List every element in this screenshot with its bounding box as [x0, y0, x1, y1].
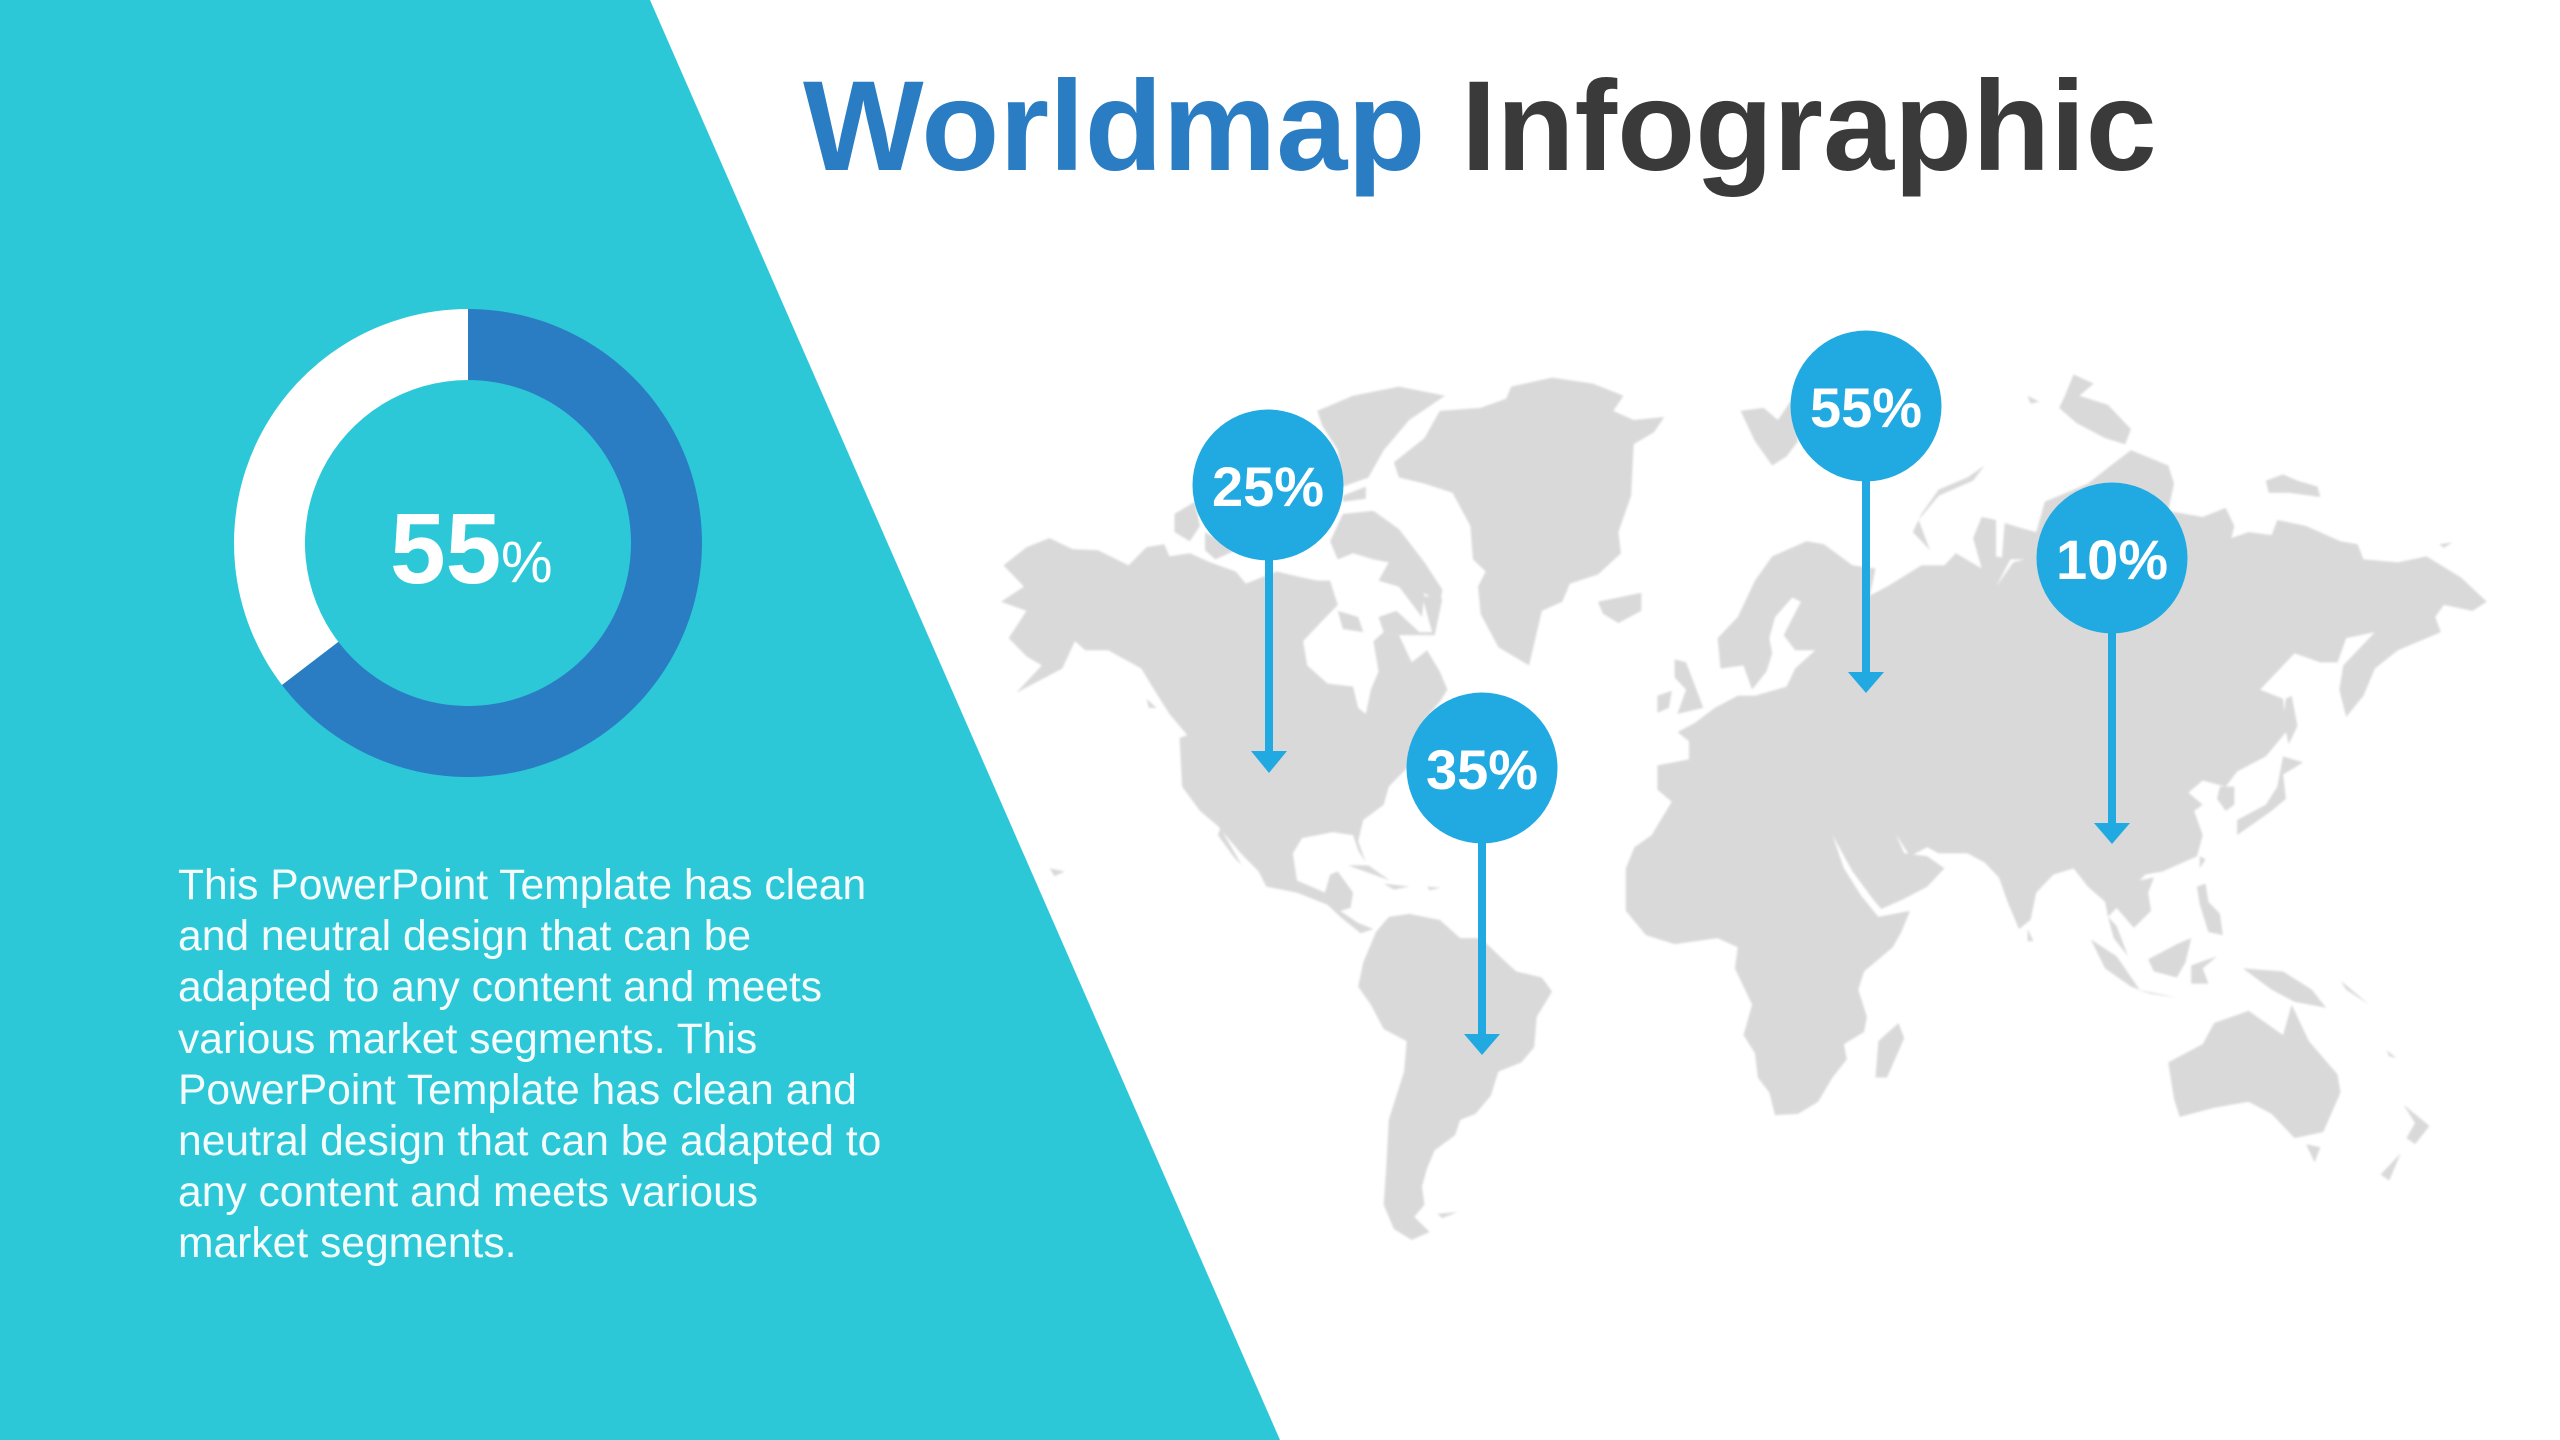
Falkland Islands [1437, 1212, 1458, 1218]
Eurasia and Africa [1626, 450, 2487, 1115]
Sulawesi [2191, 956, 2217, 984]
Ireland [1657, 691, 1672, 713]
Solomon Islands [2340, 981, 2369, 1005]
map: Americas and Greenland [1001, 378, 1664, 1240]
text block: description: adapted to any content and meets [178, 963, 822, 1011]
Madagascar [1876, 1023, 1904, 1078]
New Siberian Islands [2266, 475, 2320, 497]
Australia [2168, 1005, 2340, 1138]
pin: 55% [1790, 330, 1942, 693]
Hispaniola [1384, 884, 1409, 890]
pin: 25% [1192, 410, 1344, 773]
donut chart: 55%: 55 [390, 493, 501, 605]
Sakhalin [2283, 696, 2297, 744]
text block: description: neutral design that can be adapted to [178, 1117, 881, 1165]
donut chart: 55%: % [501, 530, 553, 595]
text block: description: and neutral design that can be [178, 912, 751, 960]
map: Eurasia, Africa and Oceania [1626, 375, 2487, 1181]
Ungava peninsula [1379, 596, 1442, 635]
Iceland [1598, 593, 1641, 623]
Devon Island [1343, 487, 1366, 502]
Sri Lanka [2028, 929, 2033, 941]
Wrangel Island [2439, 542, 2452, 548]
New Zealand south [2381, 1153, 2401, 1181]
text block: description: PowerPoint Template has clean and [178, 1066, 857, 1114]
Cuba [1348, 865, 1390, 881]
world map [1001, 375, 2487, 1240]
Baja California [1218, 828, 1242, 865]
Banks Island [1174, 502, 1200, 541]
title: Worldmap Infographic [803, 55, 2157, 198]
panel: teal diagonal background [0, 0, 1280, 1440]
Malay Peninsula [2108, 917, 2128, 956]
Taiwan [2200, 856, 2206, 868]
Novaya Zemlya [1913, 465, 1985, 550]
Sumatra [2091, 939, 2140, 990]
North America [1001, 538, 1447, 933]
Great Britain [1675, 659, 1703, 714]
pin: 35%: 35% [1426, 738, 1538, 801]
Baffin Island [1330, 511, 1442, 617]
Philippines [2197, 884, 2223, 935]
text block: description: any content and meets various [178, 1168, 758, 1216]
Tasmania [2306, 1144, 2320, 1162]
Hawaii [1049, 868, 1065, 876]
Ellesmere Island [1317, 387, 1445, 487]
pin: 25%: 25% [1212, 455, 1324, 518]
Vanuatu [2386, 1050, 2397, 1058]
Severnaya Zemlya [2028, 396, 2039, 404]
text block: description: various market segments. This [178, 1015, 757, 1063]
Greenland [1394, 378, 1664, 665]
South America [1358, 914, 1552, 1240]
Franz Josef Land [2059, 375, 2131, 444]
donut chart: 55% [234, 309, 702, 777]
New Zealand north [2404, 1105, 2429, 1144]
text block: description: This PowerPoint Template has clean [178, 861, 866, 909]
Borneo [2148, 938, 2191, 978]
Vancouver Island [1146, 699, 1157, 708]
Southampton Island [1338, 611, 1363, 632]
Japan [2237, 756, 2303, 835]
pin: 10%: 10% [2056, 528, 2168, 591]
pin: 55%: 55% [1810, 376, 1922, 439]
Korea [2217, 787, 2234, 811]
Svalbard [1741, 399, 1798, 465]
Victoria Island [1205, 532, 1236, 559]
Puerto Rico [1427, 887, 1441, 890]
text block: description: market segments. [178, 1219, 517, 1267]
New Guinea [2243, 968, 2326, 1008]
pin: 35% [1406, 692, 1558, 1055]
pin: 10% [2036, 482, 2188, 844]
Java [2137, 990, 2177, 998]
